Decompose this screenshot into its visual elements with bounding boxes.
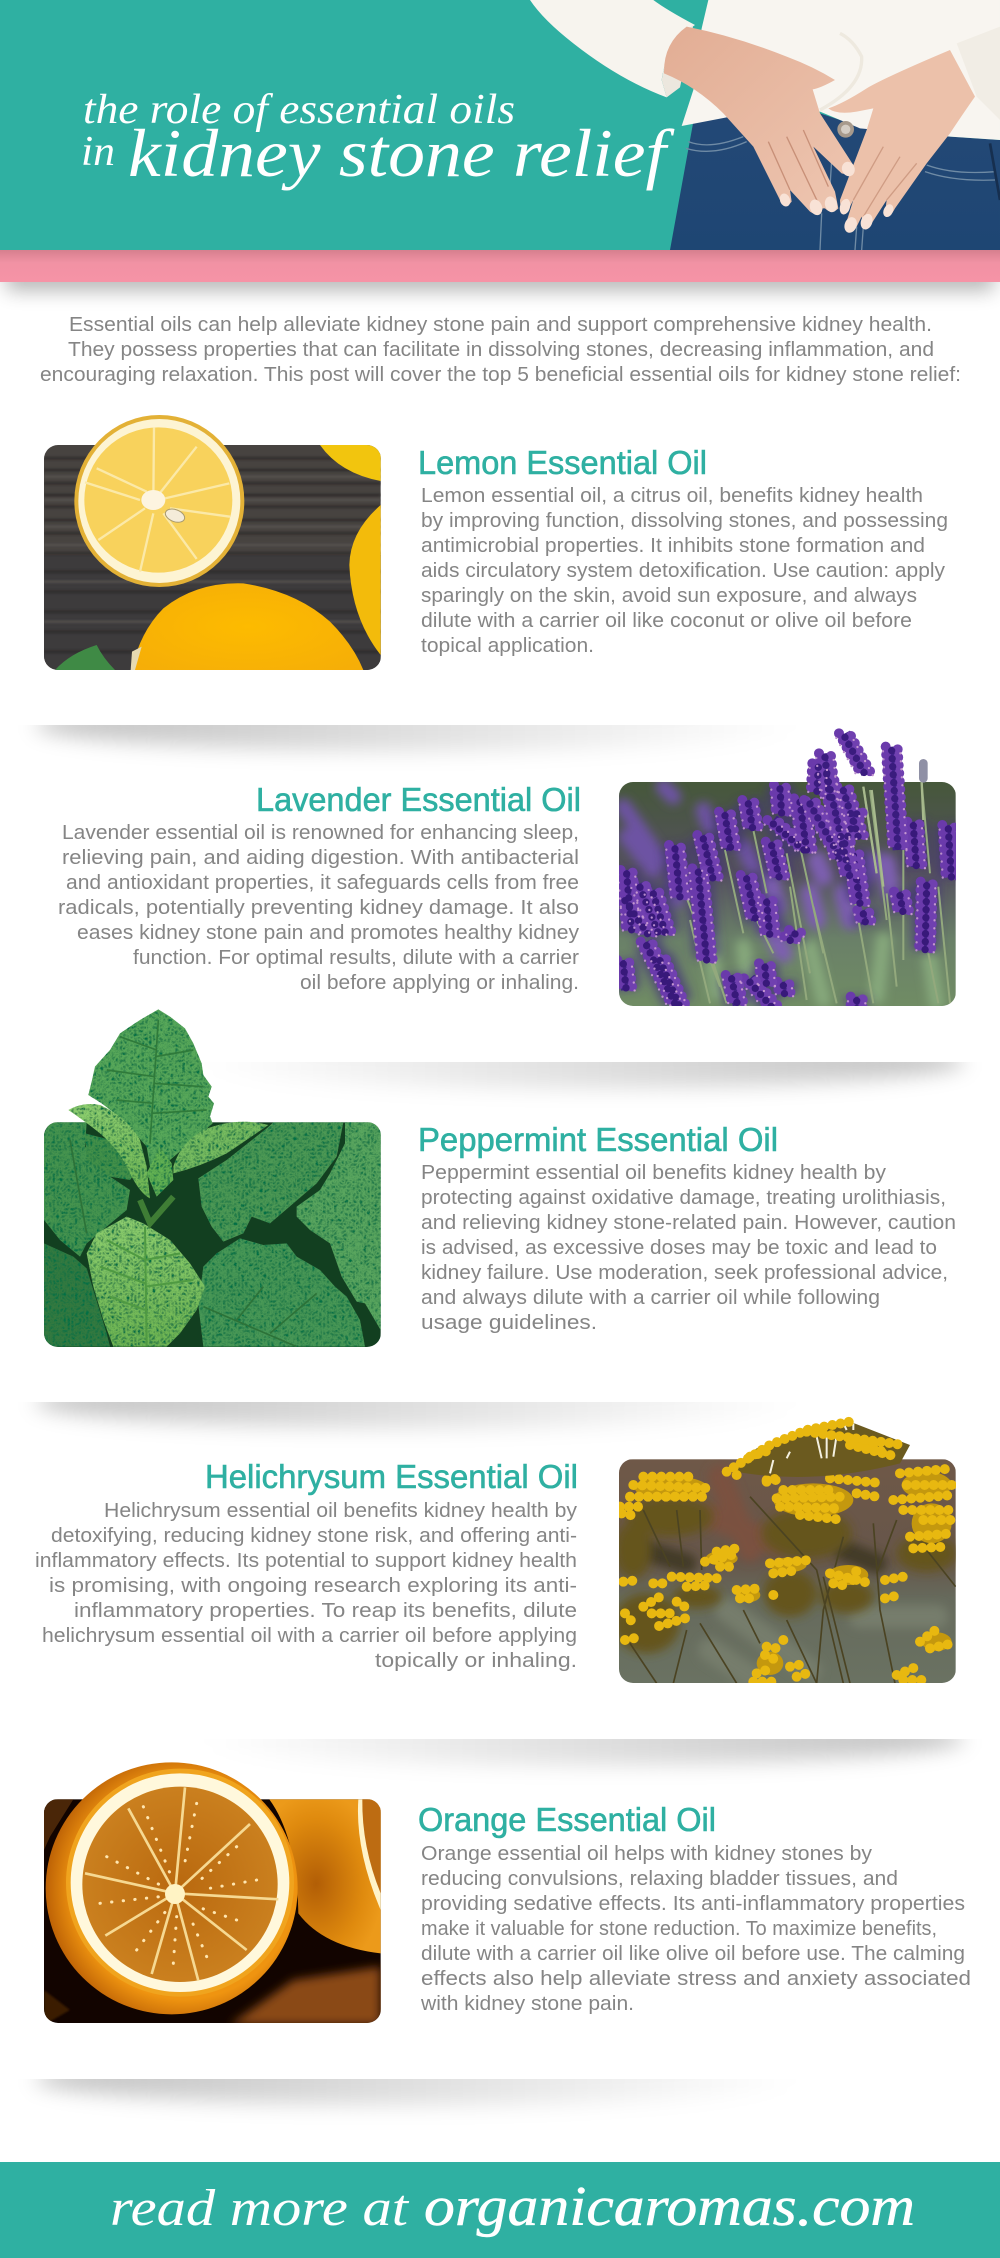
body text: with kidney stone pain. [420,1993,634,2015]
body text: is advised, as excessive doses may be toxic and lead to [421,1237,937,1259]
body text: kidney failure. Use moderation, seek professional advice, [421,1262,948,1284]
body text [421,485,948,657]
pink band [0,250,1000,282]
heading: Lemon Essential Oil [418,444,707,481]
body text: providing sedative effects. Its anti-inflammatory properties [421,1893,965,1915]
teal footer background [0,2162,1000,2258]
body text: detoxifying, reducing kidney stone risk, and offering anti- [51,1525,577,1547]
heading: Lavender Essential Oil [256,781,581,818]
body text: Lavender essential oil is renowned for enhancing sleep, [62,822,579,844]
body text: and antioxidant properties, it safeguards cells from free [66,872,579,894]
heading: Peppermint Essential Oil [418,1121,778,1158]
body text: function. For optimal results, dilute with a carrier [133,947,579,969]
footer text: read more at [110,2180,410,2237]
body text: by improving function, dissolving stones, and possessing [421,510,948,532]
section: orange essential oil [44,1762,971,2025]
body text: dilute with a carrier oil like coconut or olive oil before [421,610,912,632]
body text: and always dilute with a carrier oil while following [421,1287,880,1309]
section: lemon essential oil [44,415,948,670]
body text: effects also help alleviate stress and anxiety associated [421,1968,971,1990]
intro text: encouraging relaxation. This post will cover the top 5 beneficial essential oils for kidney stone relief: [40,364,961,386]
body text: inflammatory properties. To reap its benefits, dilute [74,1600,577,1622]
body text: Lemon essential oil, a citrus oil, benefits kidney health [421,485,923,507]
photo: woman holding lower abdomen [530,0,1000,250]
heading: Helichrysum Essential Oil [205,1458,578,1495]
photo: lemons on dark wood [44,415,381,670]
title: kidney stone relief [128,115,675,191]
title [81,87,675,191]
header banner [0,0,1000,250]
body text: radicals, potentially preventing kidney damage. It also [58,897,579,919]
body text: relieving pain, and aiding digestion. With antibacterial [62,847,579,869]
section: peppermint essential oil [44,1009,956,1347]
title: in [81,129,115,175]
body text: oil before applying or inhaling. [300,972,579,994]
body text: aids circulatory system detoxification. Use caution: apply [421,560,945,582]
section: lavender essential oil [58,733,960,1012]
body text: topically or inhaling. [375,1650,577,1672]
body text: Orange essential oil helps with kidney stones by [421,1843,872,1865]
body text: inflammatory effects. Its potential to support kidney health [35,1550,577,1572]
teal background [0,0,1000,250]
body text: is promising, with ongoing research exploring its anti- [49,1575,577,1597]
footer text [110,2176,915,2238]
body text: dilute with a carrier oil like olive oil before use. The calming [421,1943,965,1965]
body text: eases kidney stone pain and promotes healthy kidney [77,922,579,944]
right hand [828,50,975,231]
body text: and relieving kidney stone-related pain. However, caution [421,1212,956,1234]
photo: helichrysum flowers [613,1422,957,1684]
photo: lavender field [615,733,960,1012]
title: the role of essential oils [83,87,515,133]
intro text: They possess properties that can facilitate in dissolving stones, decreasing inflammation, and [68,339,934,361]
body text [35,1500,577,1672]
body text: Helichrysum essential oil benefits kidney health by [104,1500,577,1522]
body text: reducing convulsions, relaxing bladder tissues, and [421,1868,898,1890]
body text: make it valuable for stone reduction. To maximize benefits, [421,1918,937,1940]
left hand [664,27,854,214]
body text: topical application. [421,635,594,657]
photo: peppermint leaves [44,1009,381,1347]
body text: usage guidelines. [421,1312,597,1334]
photo: halved oranges [44,1762,381,2025]
intro text: Essential oils can help alleviate kidney stone pain and support comprehensive kidney health. [69,314,932,336]
body text [58,822,579,994]
body text: protecting against oxidative damage, treating urolithiasis, [421,1187,946,1209]
body text: Peppermint essential oil benefits kidney health by [421,1162,886,1184]
section: helichrysum essential oil [35,1422,957,1684]
footer banner [0,2162,1000,2258]
body text: antimicrobial properties. It inhibits stone formation and [421,535,925,557]
body text: sparingly on the skin, avoid sun exposure, and always [421,585,917,607]
body text [420,1843,971,2015]
intro text [40,314,961,386]
body text: helichrysum essential oil with a carrier oil before applying [42,1625,577,1647]
body text [421,1162,956,1334]
heading: Orange Essential Oil [418,1801,716,1838]
footer text: organicaromas.com [424,2176,915,2238]
